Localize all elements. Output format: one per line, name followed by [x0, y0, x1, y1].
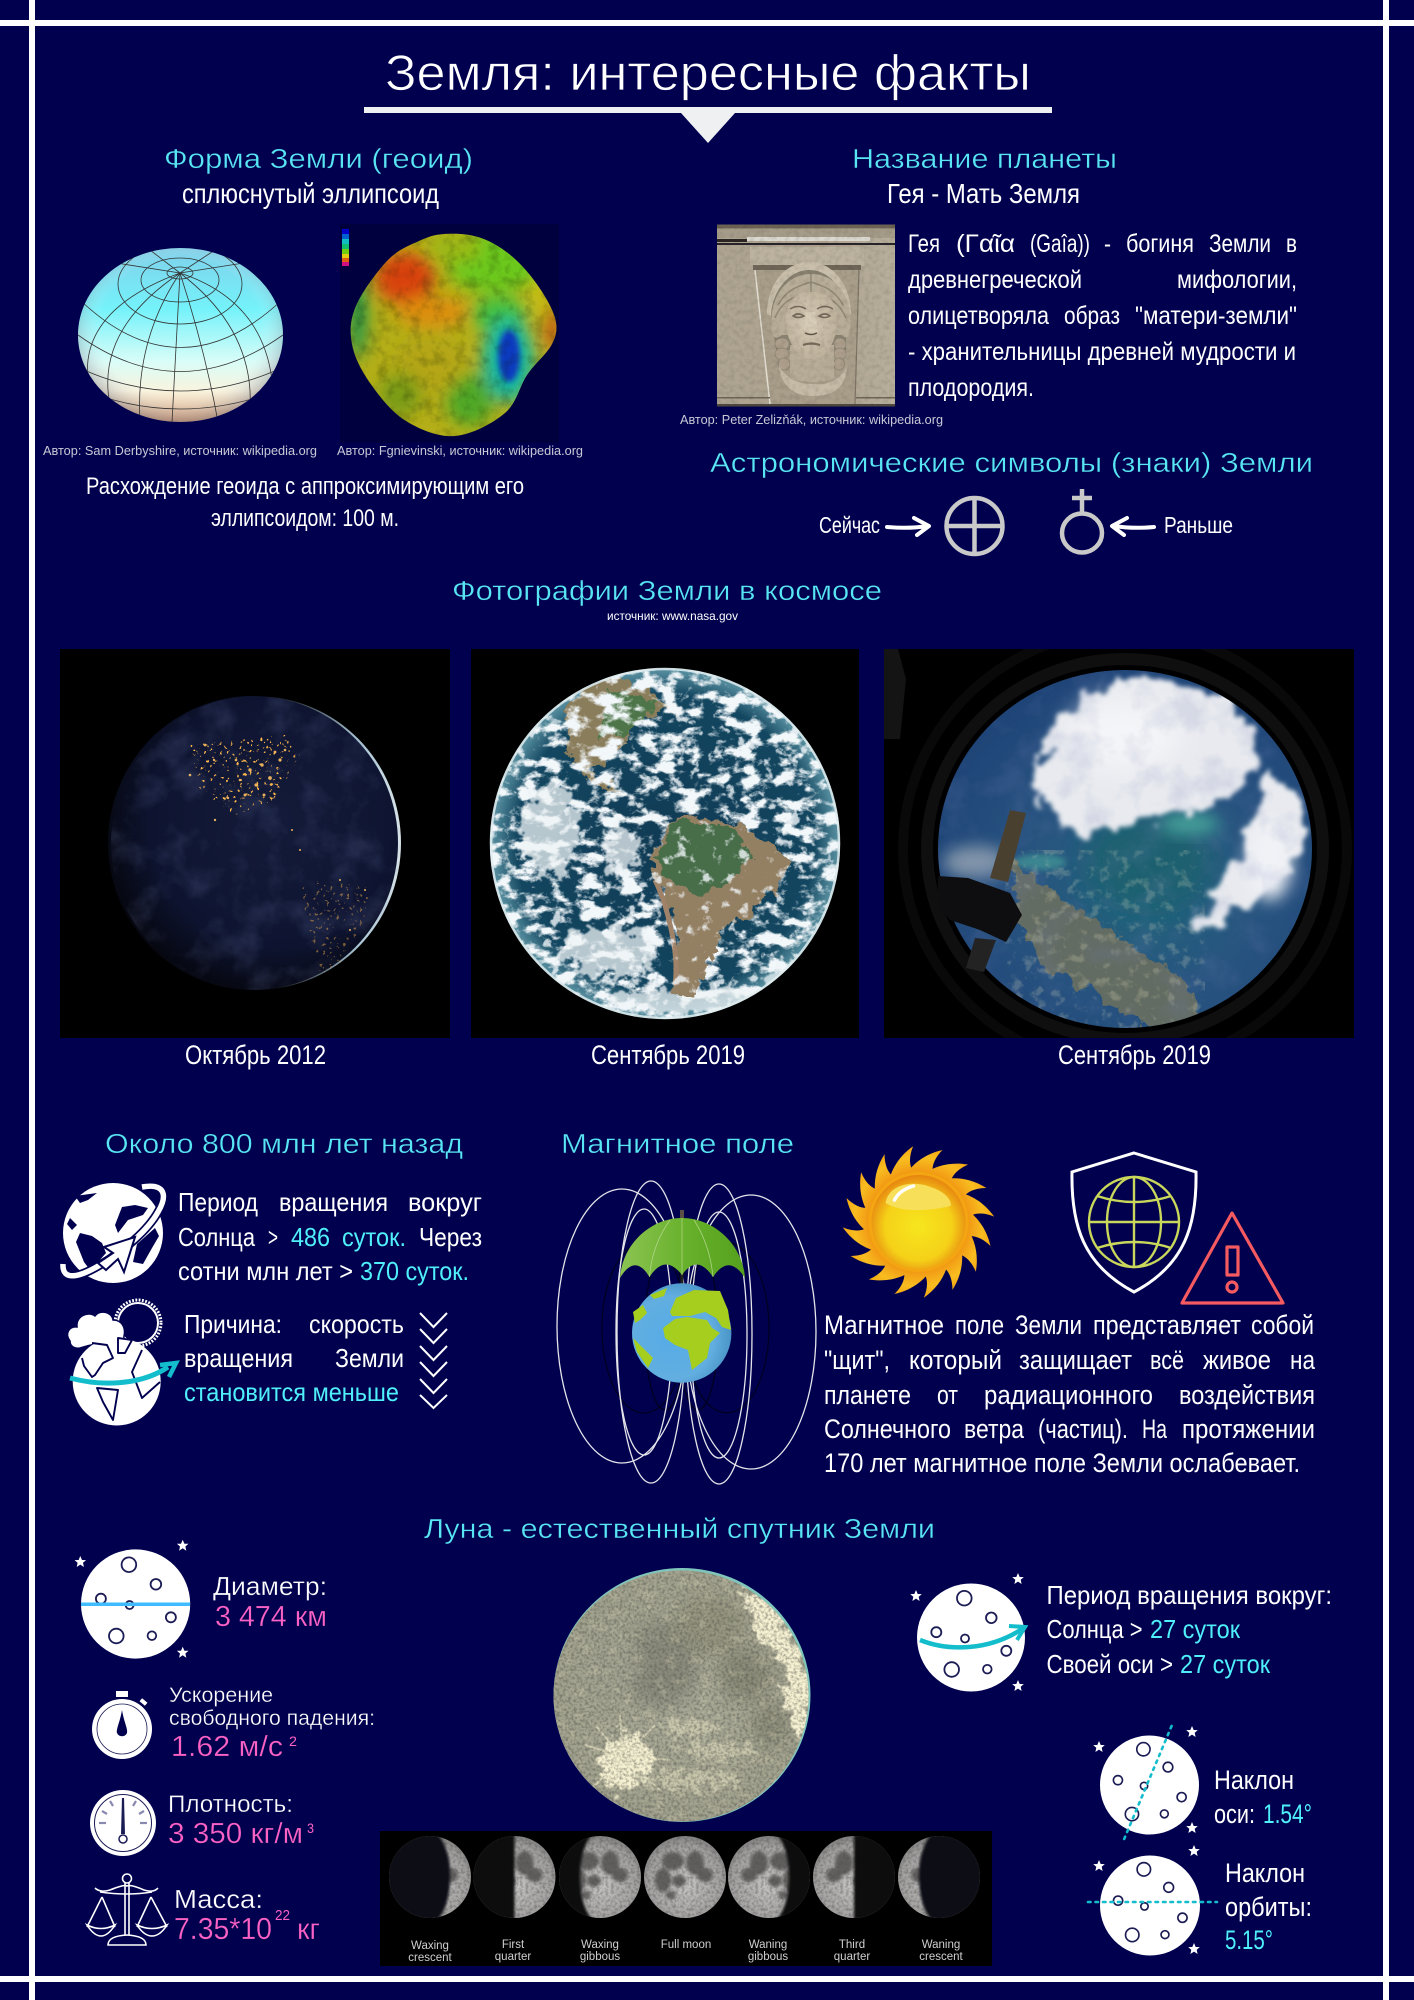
text: magnetic field description: Магнитное	[824, 1310, 944, 1340]
text: magnetic field description: защищает	[1019, 1345, 1132, 1375]
hurricane clouds	[1040, 682, 1304, 930]
symbol: old sign	[1062, 489, 1102, 552]
phase: waxing gibbous	[559, 1836, 641, 1918]
stat: rotation period: Своей оси >	[1046, 1649, 1173, 1679]
photo: Moon	[553, 1568, 815, 1824]
continent: North America	[563, 677, 667, 790]
photo: Moon phases strip	[380, 1831, 992, 1966]
icon: Moon axis tilt	[1093, 1726, 1199, 1843]
phase: waning gibbous	[728, 1836, 810, 1918]
icon: scales	[87, 1874, 167, 1945]
stat: diameter: Диаметр:	[213, 1571, 327, 1601]
text: magnetic field description: на	[1290, 1345, 1316, 1375]
text: magnetic field description: воздействия	[1179, 1380, 1315, 1410]
phase labels: crescent	[408, 1952, 453, 1964]
text: Gaia description: Гея	[908, 230, 940, 258]
text: cause: Земли	[335, 1343, 404, 1373]
icon: Moon orbit tilt	[1088, 1845, 1217, 1956]
text: geoid deviation: Расхождение геоида с аппроксимирующим его	[86, 473, 524, 500]
continent: South America	[649, 815, 790, 993]
stat: gravity: Ускорение	[169, 1684, 273, 1707]
stat: mass: 7.35*10	[174, 1911, 272, 1946]
text: magnetic field description: ветра	[964, 1414, 1025, 1444]
phase labels: Waning	[922, 1939, 960, 1951]
head: bust	[779, 366, 847, 396]
text: rotation period then: суток.	[342, 1222, 406, 1252]
text: cause	[184, 1309, 404, 1407]
text: magnetic field description: 170 лет магнитное поле Земли ослабевает.	[824, 1448, 1300, 1478]
text: magnetic field description: планете	[824, 1380, 911, 1410]
panel: geoid shape	[43, 143, 583, 532]
label: now: Сейчас	[819, 512, 880, 538]
heading: planet name: Название планеты	[852, 143, 1117, 174]
phase labels: Full moon	[661, 1939, 711, 1951]
text: magnetic field description: живое	[1203, 1345, 1271, 1375]
text: rotation period then: вокруг	[408, 1187, 482, 1217]
stat: orbit tilt: орбиты:	[1225, 1892, 1312, 1922]
caption: author of ellipsoid: Автор: Sam Derbyshire, источник: wikipedia.org	[43, 444, 317, 458]
text: Gaia description: (Γαῖα	[956, 230, 1015, 258]
panel: photos from space	[60, 575, 1354, 1070]
stat: axis tilt: Наклон	[1214, 1765, 1294, 1795]
text: magnetic field description: "щит",	[824, 1345, 890, 1375]
icon: shield with globe	[1072, 1153, 1196, 1292]
text: rotation period then: вращения	[279, 1187, 388, 1217]
stat: orbit tilt: 5.15°	[1225, 1925, 1273, 1955]
head: side curls	[775, 338, 846, 370]
text: rotation period then: >	[268, 1222, 278, 1252]
panel: magnetic field	[557, 1128, 1316, 1484]
icon: globe with orbit arrow	[63, 1183, 163, 1283]
land: Cuba	[1010, 858, 1200, 1032]
phase: third quarter	[813, 1836, 895, 1918]
text: Gaia description: древнегреческой	[908, 266, 1082, 294]
photo: hurricane from station	[884, 649, 1354, 1038]
stat: mass: Масса:	[174, 1884, 263, 1914]
arrow: now	[887, 518, 929, 535]
heading: Moon: Луна - естественный спутник Земли	[424, 1513, 935, 1544]
text: magnetic field description: Земли	[1015, 1310, 1082, 1340]
panel: planet name	[680, 143, 1297, 427]
heading: shape of Earth: Форма Земли (геоид)	[164, 143, 473, 174]
stat: gravity: 2	[289, 1733, 297, 1749]
text: magnetic field description: (частиц).	[1038, 1414, 1128, 1444]
text: magnetic field description: Солнечного	[824, 1414, 951, 1444]
text: Gaia description: образ	[1064, 302, 1120, 330]
text: rotation period then: 370 суток.	[360, 1256, 469, 1286]
phase labels: quarter	[495, 1951, 531, 1963]
stat: axis tilt: оси:	[1214, 1799, 1255, 1829]
subheading: Gaia mother earth: Гея - Мать Земля	[887, 178, 1080, 209]
phase labels: gibbous	[748, 1951, 788, 1963]
text: magnetic field description: протяжении	[1182, 1414, 1315, 1444]
stat: density: 3	[307, 1820, 314, 1836]
text: rotation period then	[178, 1187, 482, 1286]
stat: orbit tilt	[1225, 1858, 1312, 1955]
stat: axis tilt	[1214, 1765, 1312, 1829]
text: Gaia description: плодородия.	[908, 374, 1034, 402]
stat: mass	[174, 1884, 320, 1946]
stat: axis tilt: 1.54°	[1263, 1799, 1312, 1829]
spacecraft	[884, 649, 1026, 972]
stat: diameter	[213, 1571, 327, 1633]
text: Gaia description	[908, 230, 1297, 402]
stat: density	[168, 1791, 314, 1850]
photo: Gaia relief	[717, 224, 895, 406]
icon: Earth with cloud, sun and arrow	[68, 1300, 176, 1426]
text: Gaia description: в	[1286, 230, 1297, 258]
title	[364, 45, 1052, 143]
stat: rotation period: Солнца >	[1046, 1614, 1142, 1644]
stat: gravity	[169, 1684, 375, 1763]
text: rotation period then: 486	[291, 1222, 330, 1252]
source note: источник: www.nasa.gov	[607, 609, 738, 623]
icon: stopwatch	[92, 1691, 152, 1759]
head: hair	[771, 274, 851, 338]
text: Gaia description: -	[1104, 230, 1111, 258]
text: Gaia description: богиня	[1126, 230, 1194, 258]
stat: orbit tilt: Наклон	[1225, 1858, 1305, 1888]
text: Gaia description: "матери-земли"	[1135, 302, 1297, 330]
phase labels: crescent	[919, 1951, 964, 1963]
title: Земля: интересные факты	[385, 45, 1031, 101]
phase labels: Waxing	[411, 1940, 449, 1952]
caption: author of geoid: Автор: Fgnievinski, источник: wikipedia.org	[337, 444, 583, 458]
phase labels: Waxing	[581, 1939, 619, 1951]
phase: full moon	[644, 1836, 726, 1918]
phase: waxing crescent	[389, 1836, 471, 1918]
stat: rotation period: 27 суток	[1150, 1614, 1241, 1644]
text: rotation period then: сотни млн лет >	[178, 1256, 353, 1286]
photo: night Earth	[60, 649, 450, 1038]
text: magnetic field description: радиационного	[984, 1380, 1153, 1410]
stat: gravity: свободного падения:	[169, 1707, 375, 1730]
text: magnetic field description: который	[909, 1345, 1002, 1375]
phase: first quarter	[474, 1836, 556, 1918]
text: rotation period then: Солнца	[178, 1222, 255, 1252]
text: cause: становится меньше	[184, 1377, 399, 1407]
label: September 2019 second: Сентябрь 2019	[1058, 1040, 1211, 1070]
text: Gaia description: мифологии,	[1177, 266, 1297, 294]
text: cause: Причина:	[184, 1309, 282, 1339]
stat: mass: 22	[275, 1907, 290, 1924]
phase: waning crescent	[898, 1836, 980, 1918]
icon: sun	[843, 1146, 994, 1298]
stat: rotation period	[1046, 1580, 1332, 1679]
icon: Moon rotation	[910, 1573, 1025, 1692]
illustration: geoid model	[340, 224, 559, 443]
illustration: field lines, umbrella and Earth	[557, 1181, 816, 1484]
text: magnetic field description: На	[1142, 1414, 1168, 1444]
stat: density: 3 350 кг/м	[168, 1818, 303, 1850]
stat: diameter: 3 474 км	[215, 1601, 327, 1633]
text: magnetic field description: поле	[955, 1310, 1004, 1340]
icon: warning triangle	[1182, 1213, 1283, 1303]
panel: 800 million years ago	[63, 1128, 482, 1426]
panel: Moon	[74, 1513, 1332, 1966]
text: rotation period then: Период	[178, 1187, 258, 1217]
heading: 800 million years: Около 800 млн лет назад	[105, 1128, 463, 1159]
caption: author of relief photo: Автор: Peter Zelizňák, источник: wikipedia.org	[680, 413, 943, 427]
photo: day Earth	[471, 649, 859, 1038]
heading: photos: Фотографии Земли в космосе	[452, 575, 882, 606]
phase labels: gibbous	[580, 1951, 620, 1963]
head: face	[786, 292, 837, 359]
head: halo	[767, 262, 851, 316]
heading: symbols: Астрономические символы (знаки) Земли	[710, 447, 1313, 478]
continents	[633, 1288, 731, 1370]
stat: gravity: 1.62 м/с	[171, 1731, 283, 1763]
text: geoid deviation: эллипсоидом: 100 м.	[211, 505, 399, 532]
phase labels: Third	[839, 1939, 865, 1951]
illustration: ellipsoid with grid	[78, 244, 283, 422]
text: magnetic field description: представляет	[1093, 1310, 1241, 1340]
sea: shallow water	[1096, 820, 1206, 892]
label: before: Раньше	[1164, 512, 1233, 538]
stat: rotation period: Период вращения вокруг:	[1046, 1580, 1332, 1610]
text: Gaia description: Земли	[1209, 230, 1271, 258]
stat: rotation period: 27 суток	[1180, 1649, 1271, 1679]
phase labels	[408, 1939, 964, 1964]
text: magnetic field description: собой	[1251, 1310, 1314, 1340]
icon: gauge	[90, 1790, 156, 1856]
stat: mass: кг	[297, 1913, 320, 1946]
symbol: circled cross	[946, 498, 1002, 554]
panel: astronomical symbols	[710, 447, 1313, 554]
icon: Moon diameter	[74, 1540, 190, 1659]
phase labels: First	[502, 1939, 525, 1951]
phase labels: quarter	[834, 1951, 870, 1963]
text: Gaia description: - хранительницы древней мудрости и	[908, 338, 1296, 366]
text: Gaia description: олицетворяла	[908, 302, 1049, 330]
text: geoid deviation	[86, 473, 524, 532]
text: magnetic field description: всё	[1150, 1345, 1184, 1375]
label: October 2012: Октябрь 2012	[185, 1040, 326, 1070]
heading: magnetic field: Магнитное поле	[561, 1128, 794, 1159]
stat: density: Плотность:	[168, 1791, 293, 1818]
label: September 2019: Сентябрь 2019	[591, 1040, 745, 1070]
text: rotation period then: Через	[419, 1222, 482, 1252]
text: cause: вращения	[184, 1343, 293, 1373]
text: Gaia description: (Gaîa))	[1030, 230, 1090, 258]
text: cause: скорость	[309, 1309, 404, 1339]
subheading: oblate ellipsoid: сплюснутый эллипсоид	[182, 178, 439, 209]
arrow: before	[1112, 518, 1154, 535]
icon: downward chevrons	[420, 1313, 447, 1408]
phase labels: Waning	[749, 1939, 787, 1951]
text: magnetic field description: от	[937, 1380, 958, 1410]
text: magnetic field description	[824, 1310, 1316, 1478]
